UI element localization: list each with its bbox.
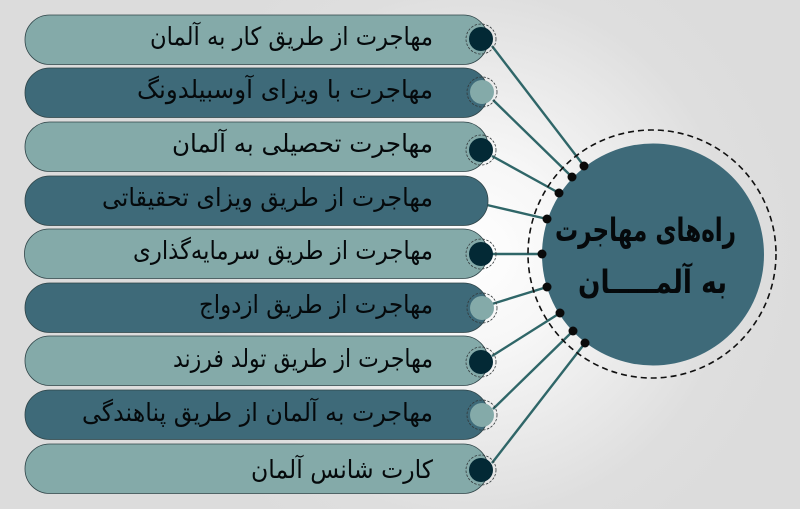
row 1: work migration — [25, 15, 496, 64]
row 5: investment — [24, 229, 496, 278]
row 2: Ausbildung visa: مهاجرت با ویزای آوسبیلدونگ — [137, 74, 433, 105]
row 4: research visa — [25, 176, 488, 226]
row 8: asylum: مهاجرت به آلمان از طریق پناهندگی — [82, 397, 433, 428]
title line 2: به آلمـــــان — [578, 262, 727, 301]
row 3: study migration: مهاجرت تحصیلی به آلمان — [172, 128, 433, 159]
row 8: asylum — [25, 390, 497, 440]
central circle with title — [528, 130, 776, 378]
row 6: marriage — [25, 283, 497, 332]
connector lines — [487, 46, 585, 463]
row 7: child birth: مهاجرت از طریق تولد فرزند — [173, 344, 433, 374]
row 4: research visa: مهاجرت از طریق ویزای تحقیقاتی — [102, 183, 433, 213]
row 9: chance card — [25, 444, 496, 494]
connector end dots — [538, 162, 590, 348]
row 1: work migration: مهاجرت از طریق کار به آلمان — [150, 21, 433, 52]
row 5: investment: مهاجرت از طریق سرمایه‌گذاری — [133, 236, 433, 266]
row 6: marriage: مهاجرت از طریق ازدواج — [199, 290, 433, 320]
row 3: study migration — [25, 122, 496, 172]
row 2: Ausbildung visa — [25, 68, 497, 118]
title line 1: راه‌های مهاجرت — [555, 211, 736, 249]
row 9: chance card: کارت شانس آلمان — [251, 454, 433, 484]
row 7: child birth — [25, 336, 496, 386]
